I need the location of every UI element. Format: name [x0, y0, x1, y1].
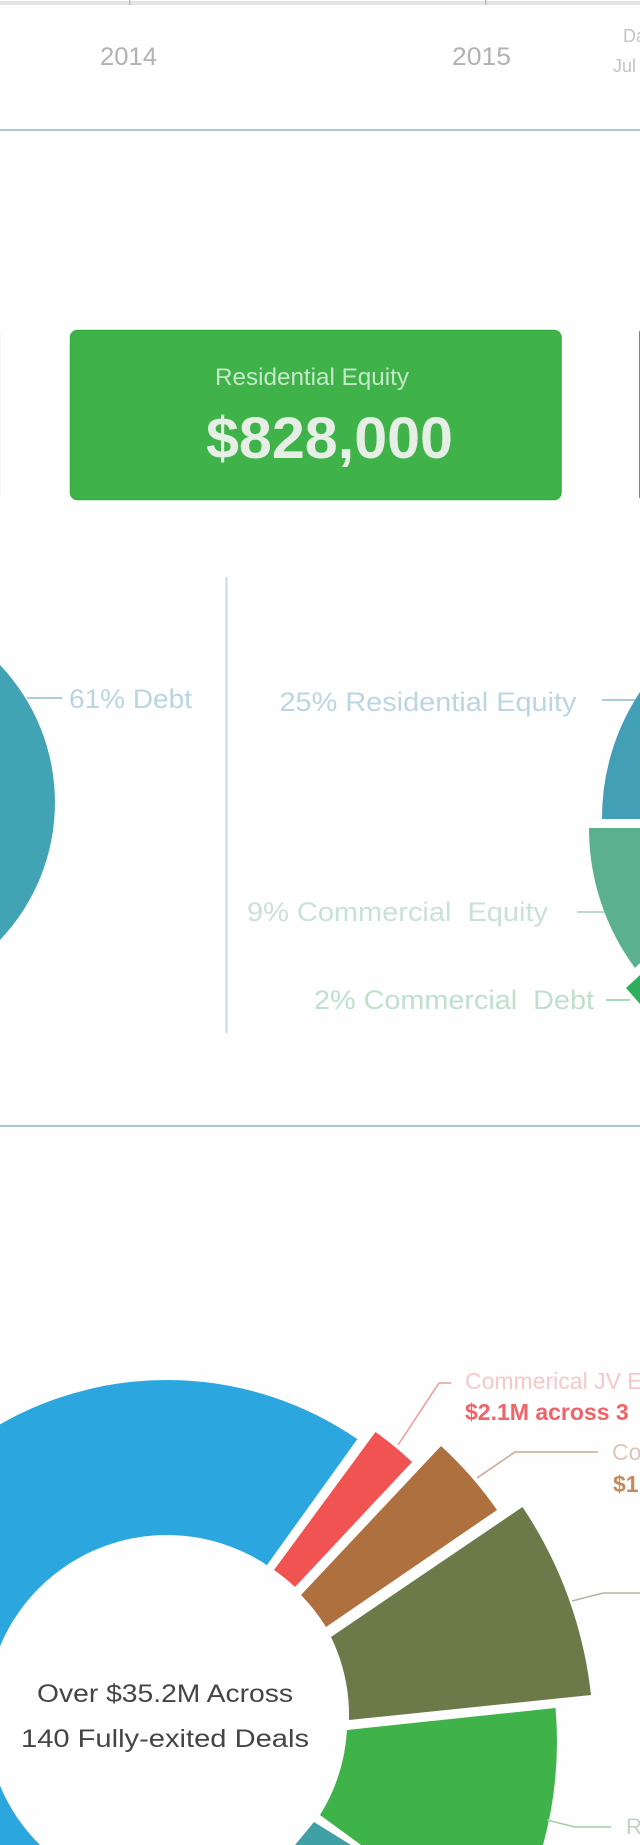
pie chart: debt vs equity: [0, 665, 193, 940]
leader line: red slice: [398, 1383, 451, 1445]
timeline label: 2014: 2014: [100, 43, 157, 71]
leader line: brown slice: [477, 1452, 598, 1478]
pie slice: commercial equity: [589, 828, 640, 968]
timeline label: clipped date note: Jul: [613, 56, 636, 76]
label: Commerical JV: Commerical JV E: [465, 1368, 640, 1394]
card value: $828,000: [206, 406, 453, 471]
leader line: residential equity: [602, 699, 638, 701]
donut slice: commercial JV equity (red): [274, 1432, 412, 1587]
label: 61% Debt: 61% Debt: [69, 684, 193, 714]
pie chart: portfolio split: [247, 687, 640, 1015]
donut slice: teal: [295, 1822, 351, 1845]
label: 25% Residential Equity: 25% Residential Equity: [280, 687, 577, 717]
leader line: olive slice: [572, 1593, 640, 1601]
donut centre text: [21, 1680, 309, 1753]
timeline axis: [0, 0, 640, 5]
label: brown slice: $1: [613, 1471, 639, 1497]
donut centre text: Over $35.2M Across: [37, 1680, 293, 1708]
card label: Residential Equity: [215, 364, 409, 391]
label: brown slice: [612, 1439, 640, 1497]
donut chart: exited deals: [0, 1380, 591, 1845]
donut slice: olive: [331, 1507, 591, 1720]
label: Commerical JV: $2.1M across 3: [465, 1399, 629, 1425]
timeline label: 2015: 2015: [452, 43, 511, 71]
label: 9% Commercial Equity: 9% Commercial Equity: [247, 897, 549, 927]
leader line: green slice: [547, 1820, 611, 1827]
label: 2% Commercial Debt: 2% Commercial Debt: [314, 985, 595, 1015]
pie slice: debt: [0, 665, 55, 940]
leader line: commercial debt: [606, 999, 630, 1001]
pie slice: commercial debt: [626, 975, 640, 1004]
donut slice: blue: [0, 1380, 357, 1845]
label: Commerical JV: [465, 1368, 640, 1425]
pie slice: residential equity: [602, 692, 640, 819]
stat card: next card edge: [639, 331, 640, 498]
donut centre text: 140 Fully-exited Deals: [21, 1725, 309, 1753]
donut slice: green: [320, 1708, 557, 1845]
donut slice: brown: [301, 1446, 497, 1627]
leader line: debt: [27, 697, 62, 699]
stat card: Residential Equity: [70, 330, 561, 500]
leader line: commercial equity: [577, 911, 605, 913]
timeline label: clipped date note: [613, 26, 640, 76]
